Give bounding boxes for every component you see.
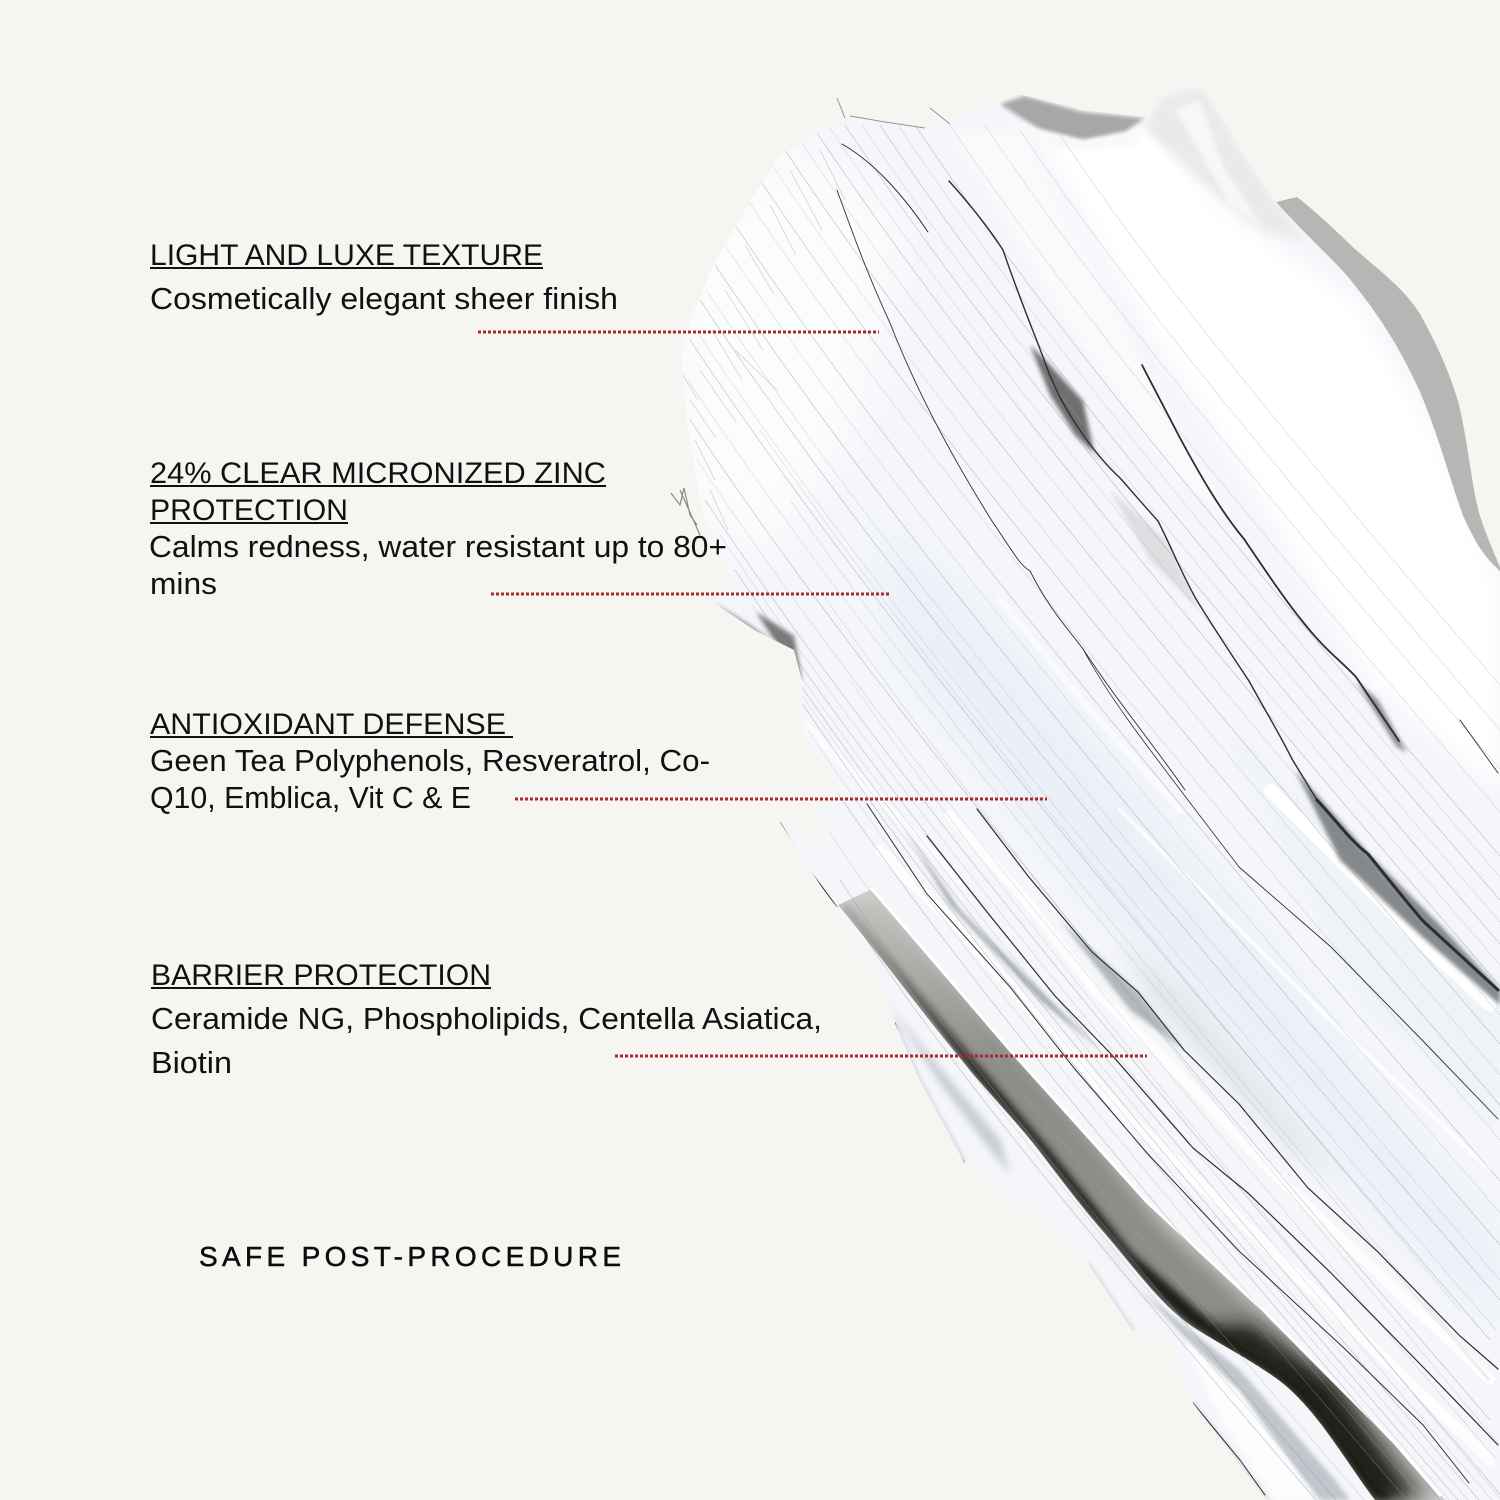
white stripes	[800, 600, 1490, 1495]
callout: barrier protection: Biotin	[151, 1045, 232, 1080]
dark creases	[780, 144, 1498, 1495]
callout: barrier protection	[151, 959, 1147, 1080]
heading: ANTIOXIDANT DEFENSE	[150, 708, 506, 741]
callout: antioxidant defense	[150, 708, 1047, 815]
fine brush lines	[690, 125, 1500, 1500]
edge flecks	[671, 488, 700, 535]
leader line	[515, 798, 1047, 800]
soft tonal areas	[1054, 136, 1494, 768]
heading: LIGHT AND LUXE TEXTURE	[150, 239, 543, 272]
outer lip tones	[896, 1015, 1010, 1171]
top right ribbon	[1145, 88, 1305, 240]
callout: clear micronized zinc: mins	[150, 566, 217, 601]
grey shadow behind right edge	[1276, 197, 1500, 590]
leader line	[615, 1054, 1147, 1058]
lower left grey shadow band	[838, 890, 1445, 1500]
description: Cosmetically elegant sheer finish	[150, 281, 618, 316]
description: Geen Tea Polyphenols, Resveratrol, Co-	[150, 743, 710, 778]
leader line	[478, 330, 879, 334]
callout: clear micronized zinc: PROTECTION	[150, 494, 348, 527]
description: Ceramide NG, Phospholipids, Centella Asiatica,	[151, 1001, 822, 1036]
callout: clear micronized zinc	[149, 457, 891, 601]
leader line	[491, 592, 891, 596]
heading: BARRIER PROTECTION	[151, 959, 491, 992]
callout: light and luxe texture	[150, 239, 879, 332]
frayed left edge hatch	[680, 150, 845, 530]
top folded flap	[1000, 96, 1145, 140]
smear surface detail	[670, 88, 1500, 1500]
description: Calms redness, water resistant up to 80+	[149, 529, 727, 564]
grey wedges	[1028, 344, 1110, 468]
cream smear	[670, 85, 1500, 1500]
smear body	[681, 85, 1500, 1500]
heading: 24% CLEAR MICRONIZED ZINC	[150, 457, 606, 490]
callout: antioxidant defense: Q10, Emblica, Vit C & E	[150, 780, 471, 815]
footer label: SAFE POST-PROCEDURE	[199, 1241, 621, 1272]
